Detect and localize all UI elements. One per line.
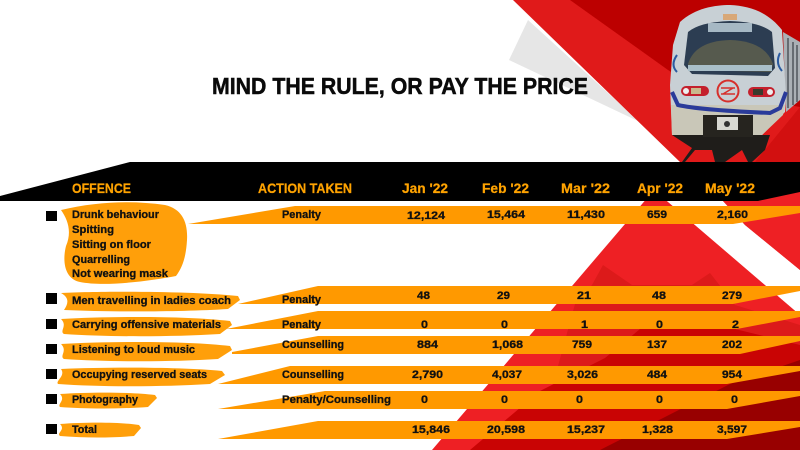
row: total: 20,598 <box>487 424 525 436</box>
row: total: 1,328 <box>642 424 673 436</box>
row: occupying reserved seats <box>46 366 800 386</box>
row: drunk behaviour group <box>46 202 800 284</box>
row: photography: 0 <box>731 394 738 406</box>
row: occupying reserved seats: 954 <box>722 369 743 381</box>
row: total: Total <box>72 424 97 436</box>
row: photography: 0 <box>421 394 428 406</box>
row: photography <box>46 391 800 409</box>
red background shapes bottom <box>432 190 800 450</box>
row: drunk behaviour group: 15,464 <box>487 209 526 221</box>
icon: metro train <box>670 5 800 162</box>
row: total <box>46 421 800 439</box>
column headers: Jan '22 <box>402 180 448 196</box>
row: carrying offensive materials: 0 <box>421 319 428 331</box>
row: listening to loud music: 759 <box>572 339 592 351</box>
row: listening to loud music <box>46 336 800 361</box>
column headers <box>72 180 755 196</box>
title: MIND THE RULE, OR PAY THE PRICE <box>212 73 588 99</box>
row: drunk behaviour group: 2,160 <box>717 209 748 221</box>
row: listening to loud music: 137 <box>647 339 667 351</box>
row: drunk behaviour group: 12,124 <box>407 210 446 222</box>
row: listening to loud music: 884 <box>417 339 439 351</box>
row: drunk behaviour group: 11,430 <box>567 209 605 221</box>
row: drunk behaviour group: Penalty <box>282 209 322 221</box>
header band <box>0 162 800 201</box>
row: photography: Photography <box>72 394 139 406</box>
row: total: 15,846 <box>412 424 450 436</box>
column headers: Mar '22 <box>561 180 610 196</box>
row: drunk behaviour group: 659 <box>647 209 667 221</box>
row: men travelling in ladies coach: 29 <box>497 290 510 302</box>
row: men travelling in ladies coach: 21 <box>577 290 591 302</box>
row: photography: 0 <box>501 394 508 406</box>
row: carrying offensive materials: 0 <box>501 319 508 331</box>
row: men travelling in ladies coach: 48 <box>652 290 666 302</box>
row: men travelling in ladies coach: Men travelling in ladies coach <box>72 295 231 307</box>
row: listening to loud music: Listening to loud music <box>72 344 195 356</box>
row: carrying offensive materials: Penalty <box>282 319 322 331</box>
column headers: May '22 <box>705 180 755 196</box>
row: carrying offensive materials <box>46 311 800 336</box>
row: listening to loud music: 1,068 <box>492 339 523 351</box>
row: men travelling in ladies coach: 279 <box>722 290 742 302</box>
row: photography: 0 <box>656 394 663 406</box>
row: occupying reserved seats: 484 <box>647 369 668 381</box>
row: carrying offensive materials: 0 <box>656 319 663 331</box>
row: occupying reserved seats: 3,026 <box>567 369 598 381</box>
row: total: 15,237 <box>567 424 605 436</box>
row: drunk behaviour group: Sitting on floor <box>72 239 152 251</box>
row: carrying offensive materials: 2 <box>732 319 739 331</box>
row: carrying offensive materials: Carrying offensive materials <box>72 319 221 331</box>
row: drunk behaviour group: Drunk behaviour <box>72 209 160 221</box>
column headers: ACTION TAKEN <box>258 180 352 196</box>
row: drunk behaviour group: Spitting <box>72 224 114 236</box>
row: drunk behaviour group: Not wearing mask <box>72 268 169 280</box>
row: listening to loud music: 202 <box>722 339 742 351</box>
row: listening to loud music: Counselling <box>282 339 344 351</box>
row: carrying offensive materials: 1 <box>581 319 588 331</box>
row: men travelling in ladies coach: Penalty <box>282 294 322 306</box>
row: drunk behaviour group: Quarrelling <box>72 254 130 266</box>
row: men travelling in ladies coach <box>46 286 800 311</box>
row: photography: Penalty/Counselling <box>282 394 391 406</box>
row: photography: 0 <box>576 394 583 406</box>
row: occupying reserved seats: Occupying reserved seats <box>72 369 207 381</box>
column headers: Apr '22 <box>637 180 683 196</box>
column headers: OFFENCE <box>72 180 131 196</box>
row: total: 3,597 <box>717 424 747 436</box>
column headers: Feb '22 <box>482 180 529 196</box>
row: occupying reserved seats: 2,790 <box>412 369 443 381</box>
row: occupying reserved seats: Counselling <box>282 369 344 381</box>
grey background shard <box>509 20 640 122</box>
row: men travelling in ladies coach: 48 <box>417 290 430 302</box>
row: occupying reserved seats: 4,037 <box>492 369 522 381</box>
red background shapes top right <box>513 0 800 270</box>
